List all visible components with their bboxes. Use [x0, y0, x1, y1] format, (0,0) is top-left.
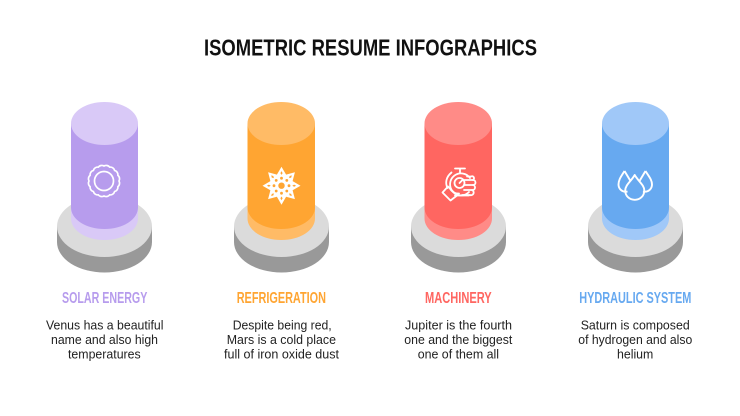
icon: hand with stopwatch — [442, 168, 476, 200]
panel: solar energy — [46, 102, 164, 362]
text: machinery description: one and the biggest — [404, 333, 513, 347]
text: solar energy description: temperatures — [68, 348, 141, 362]
text: solar energy description: Venus has a beautiful — [46, 318, 164, 332]
text: refrigeration description: Despite being red, — [233, 318, 332, 332]
cylinder: refrigeration — [234, 102, 329, 272]
text: refrigeration description: full of iron oxide dust — [224, 348, 340, 362]
text: refrigeration description — [224, 318, 340, 362]
heading: hydraulic system: HYDRAULIC SYSTEM — [579, 290, 691, 307]
icon: sun badge — [88, 165, 120, 197]
heading: solar energy: SOLAR ENERGY — [62, 290, 148, 307]
cylinder: solar energy — [57, 102, 152, 272]
text: hydraulic system description — [578, 318, 692, 362]
text: hydraulic system description: Saturn is composed — [581, 318, 690, 332]
icon: water drops — [618, 171, 652, 200]
text: machinery description: one of them all — [418, 348, 499, 362]
icon: snowflake star — [262, 167, 300, 205]
title: ISOMETRIC RESUME INFOGRAPHICS — [204, 34, 537, 60]
text: hydraulic system description: helium — [617, 348, 653, 362]
panel: machinery — [404, 102, 513, 362]
text: refrigeration description: Mars is a cold place — [227, 333, 336, 347]
panel: refrigeration — [224, 102, 340, 362]
heading: machinery: MACHINERY — [425, 290, 492, 307]
cylinder: machinery — [411, 102, 506, 272]
panel: hydraulic system — [578, 102, 692, 362]
cylinder: hydraulic system — [588, 102, 683, 272]
text: hydraulic system description: of hydrogen and also — [578, 333, 692, 347]
text: solar energy description: name and also high — [51, 333, 158, 347]
text: machinery description — [404, 318, 513, 362]
heading: refrigeration: REFRIGERATION — [237, 290, 326, 307]
text: machinery description: Jupiter is the fourth — [405, 318, 512, 332]
text: solar energy description — [46, 318, 164, 362]
